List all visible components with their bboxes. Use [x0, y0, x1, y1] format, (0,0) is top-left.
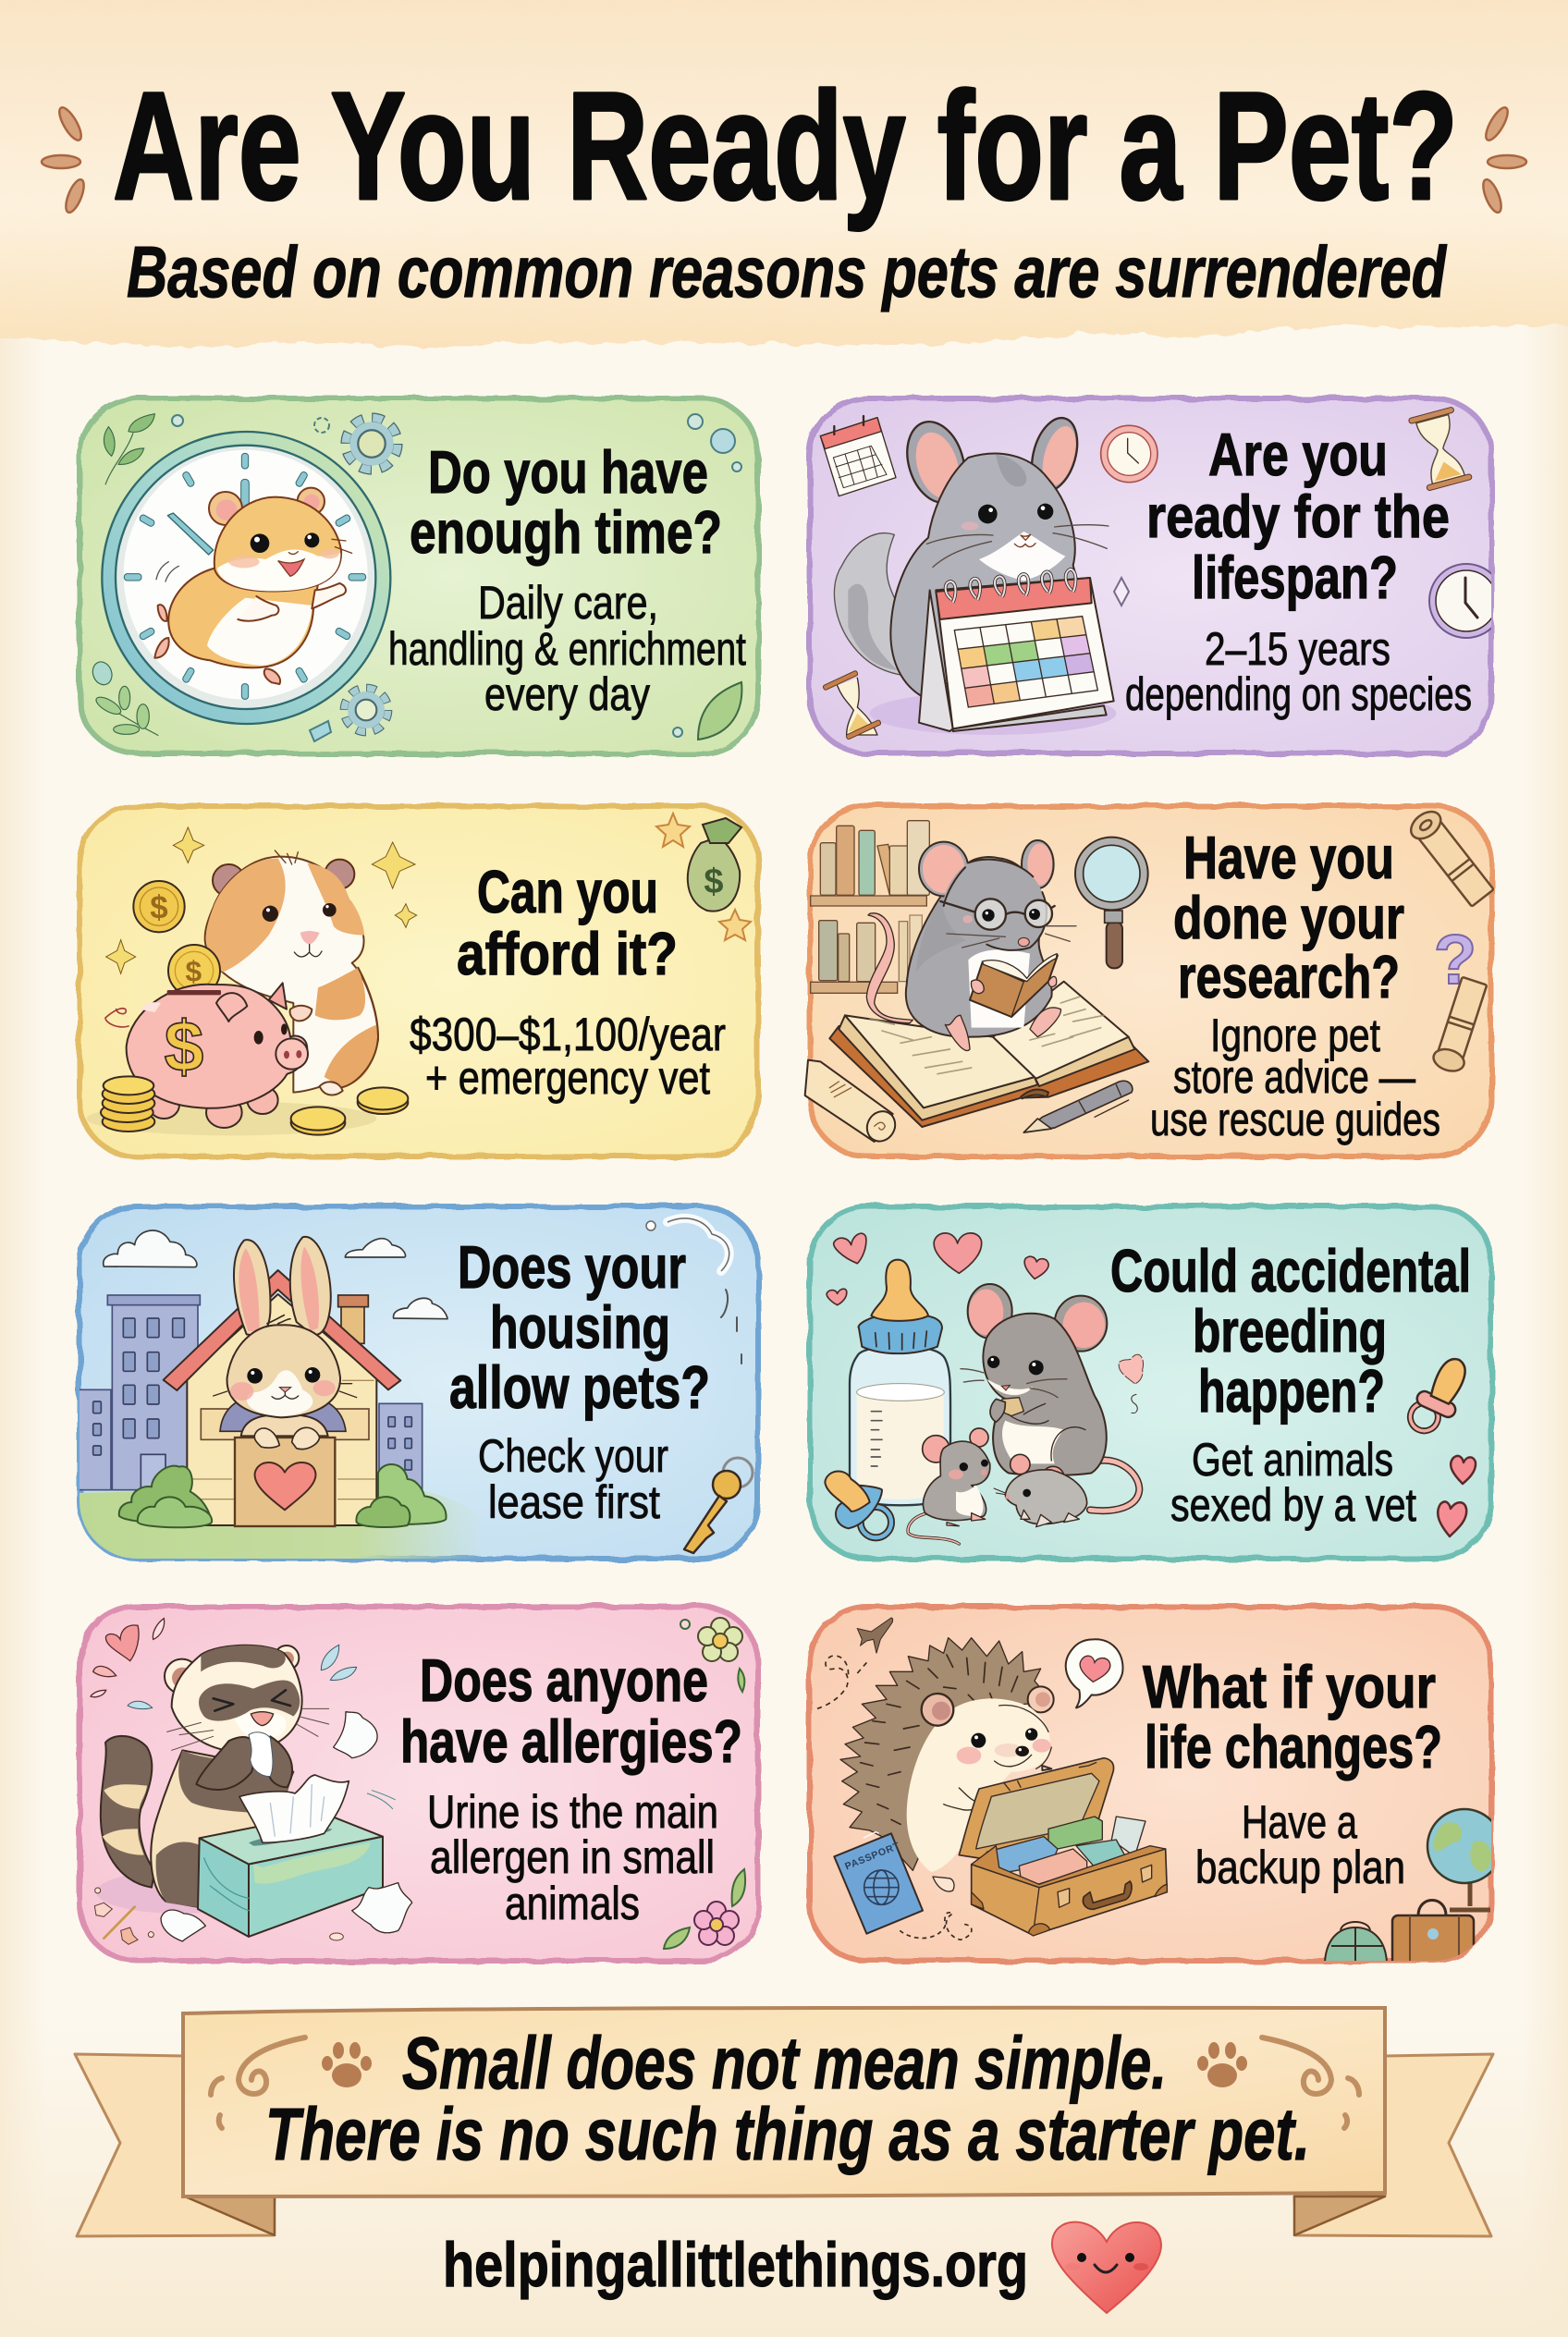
card background teal [810, 1206, 1491, 1559]
passport [834, 1833, 923, 1934]
icon: sparkle [1114, 578, 1129, 606]
heading: enough time? [410, 498, 722, 566]
panel: research [805, 806, 1496, 1156]
icon: gear top [346, 418, 398, 470]
description [1170, 1434, 1416, 1531]
box top [200, 1814, 383, 1865]
mother mouse [1090, 1461, 1139, 1511]
icon: leaves pink card [664, 1620, 745, 1949]
banner text: Small does not mean simple. [402, 2022, 1167, 2104]
description: $300–$1,100/year [410, 1009, 726, 1060]
banner right tail [1294, 2054, 1493, 2236]
illustration: guinea pig and piggy bank: $ [186, 955, 202, 988]
crumpled tissues [161, 1712, 412, 1941]
icon: scroll top right [1406, 806, 1496, 908]
icon: money bag [688, 818, 741, 912]
icon: top-left sprig [104, 414, 154, 484]
heading: afford it? [457, 920, 678, 987]
illustration: guinea pig and piggy bank: $ [150, 889, 168, 925]
banner left tail [75, 2054, 275, 2236]
icon: right title sprig [1479, 104, 1526, 214]
icon: flower bottom right [694, 1902, 739, 1945]
heading: life changes? [1145, 1713, 1442, 1780]
heading [1110, 1237, 1471, 1425]
icon: yellow stars [656, 814, 751, 940]
illustration: guinea pig and piggy bank [87, 827, 417, 1135]
description [1195, 1796, 1405, 1893]
plane [857, 1618, 893, 1653]
icon: flower top right [698, 1618, 742, 1661]
heading: Are you [1208, 421, 1388, 488]
icon: globe [1427, 1809, 1501, 1910]
icon: paw right [1197, 2042, 1247, 2087]
drops and bits [128, 1645, 357, 1709]
description [1150, 1009, 1440, 1145]
card background peach [810, 1607, 1491, 1961]
hearts [827, 1233, 1048, 1305]
panel: lifespan [810, 398, 1503, 753]
description: Ignore pet [1210, 1009, 1380, 1061]
illustration: hamster in clock [102, 432, 390, 724]
heading: lifespan? [1192, 544, 1398, 611]
description: + emergency vet [425, 1052, 710, 1104]
illustration: mouse reading on book [811, 821, 1148, 1127]
icon: round clock [1101, 425, 1158, 483]
banner text [265, 2022, 1310, 2175]
dashed trail [817, 1656, 868, 1708]
description: every day [484, 668, 650, 720]
heading: have allergies? [400, 1707, 742, 1775]
icon: bottom-left sprig [90, 659, 158, 736]
heading: Does your [458, 1233, 686, 1301]
icon: gear bottom [344, 688, 388, 732]
illustration: mice and bottle [825, 1233, 1144, 1544]
small heart butterfly [1119, 1354, 1144, 1384]
heading: done your [1173, 884, 1404, 951]
description: depending on species [1125, 668, 1472, 720]
heading [1143, 1653, 1442, 1780]
description: animals [505, 1878, 640, 1929]
banner folds [185, 2196, 1385, 2235]
heading [1146, 421, 1450, 611]
pacifier [861, 1507, 891, 1537]
icon: purple clock at edge [1428, 563, 1491, 639]
heading: ready for the [1146, 483, 1450, 550]
icon: left title sprig [42, 104, 88, 214]
illustration: hedgehog and suitcase: PASSPORT [843, 1841, 901, 1872]
heading [457, 858, 678, 987]
panel: life changes [810, 1607, 1501, 1967]
description: Urine is the main [427, 1786, 718, 1838]
description: use rescue guides [1150, 1094, 1440, 1145]
icon: scroll bottom right [1431, 976, 1489, 1075]
icon: green bag [1325, 1922, 1387, 1962]
icon: small calendar [820, 416, 896, 496]
description: Check your [478, 1430, 668, 1482]
description: store advice — [1173, 1051, 1415, 1103]
heading: Do you have [428, 438, 708, 506]
panel: afford [80, 806, 758, 1156]
description: Get animals [1192, 1434, 1393, 1486]
heading: breeding [1193, 1297, 1387, 1364]
suitcase lid [959, 1758, 1114, 1858]
description [410, 1009, 726, 1104]
heading: Does anyone [420, 1646, 708, 1714]
icon: pen [1023, 1081, 1133, 1132]
banner [75, 2008, 1493, 2236]
card background orange [810, 806, 1491, 1156]
description [478, 1430, 668, 1528]
heading: Have you [1183, 824, 1394, 891]
heading [400, 1646, 742, 1775]
website url: helpingallittlethings.org [443, 2230, 1028, 2300]
icon: smiling heart [1052, 2222, 1161, 2313]
ear far [1028, 1686, 1054, 1712]
box sides [198, 1838, 249, 1937]
icon: magnifying glass [1075, 838, 1148, 968]
description [427, 1786, 718, 1929]
description [388, 577, 746, 720]
description: Daily care, [478, 577, 658, 629]
baby mouse left [908, 1513, 959, 1544]
card background blue [80, 1206, 758, 1559]
card background yellow [80, 806, 758, 1156]
bottle [850, 1347, 950, 1505]
description: backup plan [1195, 1841, 1405, 1893]
card background green [80, 398, 758, 753]
illustration: hedgehog and suitcase [817, 1618, 1167, 1939]
case body [972, 1849, 1167, 1935]
illustration: chinchilla with calendar [834, 412, 1116, 735]
heading: What if your [1143, 1653, 1436, 1720]
banner right ornaments [1262, 2037, 1359, 2128]
heading: housing [490, 1293, 670, 1361]
icon: wispy clouds [646, 1218, 741, 1364]
description: 2–15 years [1205, 623, 1390, 675]
description [1125, 623, 1472, 720]
baby mouse right [1011, 1454, 1030, 1474]
icon: hourglass top right [1408, 407, 1473, 491]
description: Have a [1242, 1796, 1357, 1848]
illustration: guinea pig and piggy bank: $ [165, 1008, 203, 1086]
tissue in box [239, 1775, 349, 1842]
panel: allergies [80, 1607, 758, 1961]
banner main strip [183, 2008, 1385, 2196]
description: sexed by a vet [1170, 1479, 1416, 1531]
panel: breeding [810, 1206, 1491, 1559]
contents [1048, 1817, 1102, 1849]
icon: small hearts right [1438, 1456, 1476, 1536]
panel: enough time [80, 398, 758, 753]
icon: key [684, 1458, 753, 1553]
icon: decorations green [172, 414, 741, 741]
heading: happen? [1198, 1357, 1385, 1425]
icon: pacifier right [1405, 1351, 1476, 1440]
banner left ornaments [211, 2037, 305, 2128]
heading [1173, 824, 1404, 1010]
heading: Can you [477, 858, 658, 925]
speech bubble [1066, 1639, 1123, 1707]
illustration: sneezing ferret and tissues [91, 1619, 412, 1944]
icon: brown suitcase [1392, 1901, 1474, 1967]
heading [410, 438, 722, 566]
card background pink [80, 1607, 758, 1961]
icon: hourglass bottom [823, 670, 881, 740]
spines body [840, 1638, 1051, 1870]
description: allergen in small [430, 1831, 715, 1883]
panel: housing [78, 1206, 758, 1565]
icon: question mark: ? [1434, 921, 1476, 999]
header watercolor wash [0, 0, 1568, 348]
icon: scroll left [805, 1060, 900, 1146]
illustration: rabbit in house [78, 1230, 484, 1565]
description: handling & enrichment [388, 623, 746, 675]
face and belly [907, 1698, 1050, 1872]
card background purple [810, 398, 1491, 753]
icon: paw left [322, 2042, 372, 2087]
description: lease first [488, 1476, 660, 1528]
heading: research? [1178, 943, 1400, 1010]
heading [449, 1233, 710, 1421]
icon: money bag: $ [704, 863, 724, 901]
heading: allow pets? [449, 1353, 710, 1421]
